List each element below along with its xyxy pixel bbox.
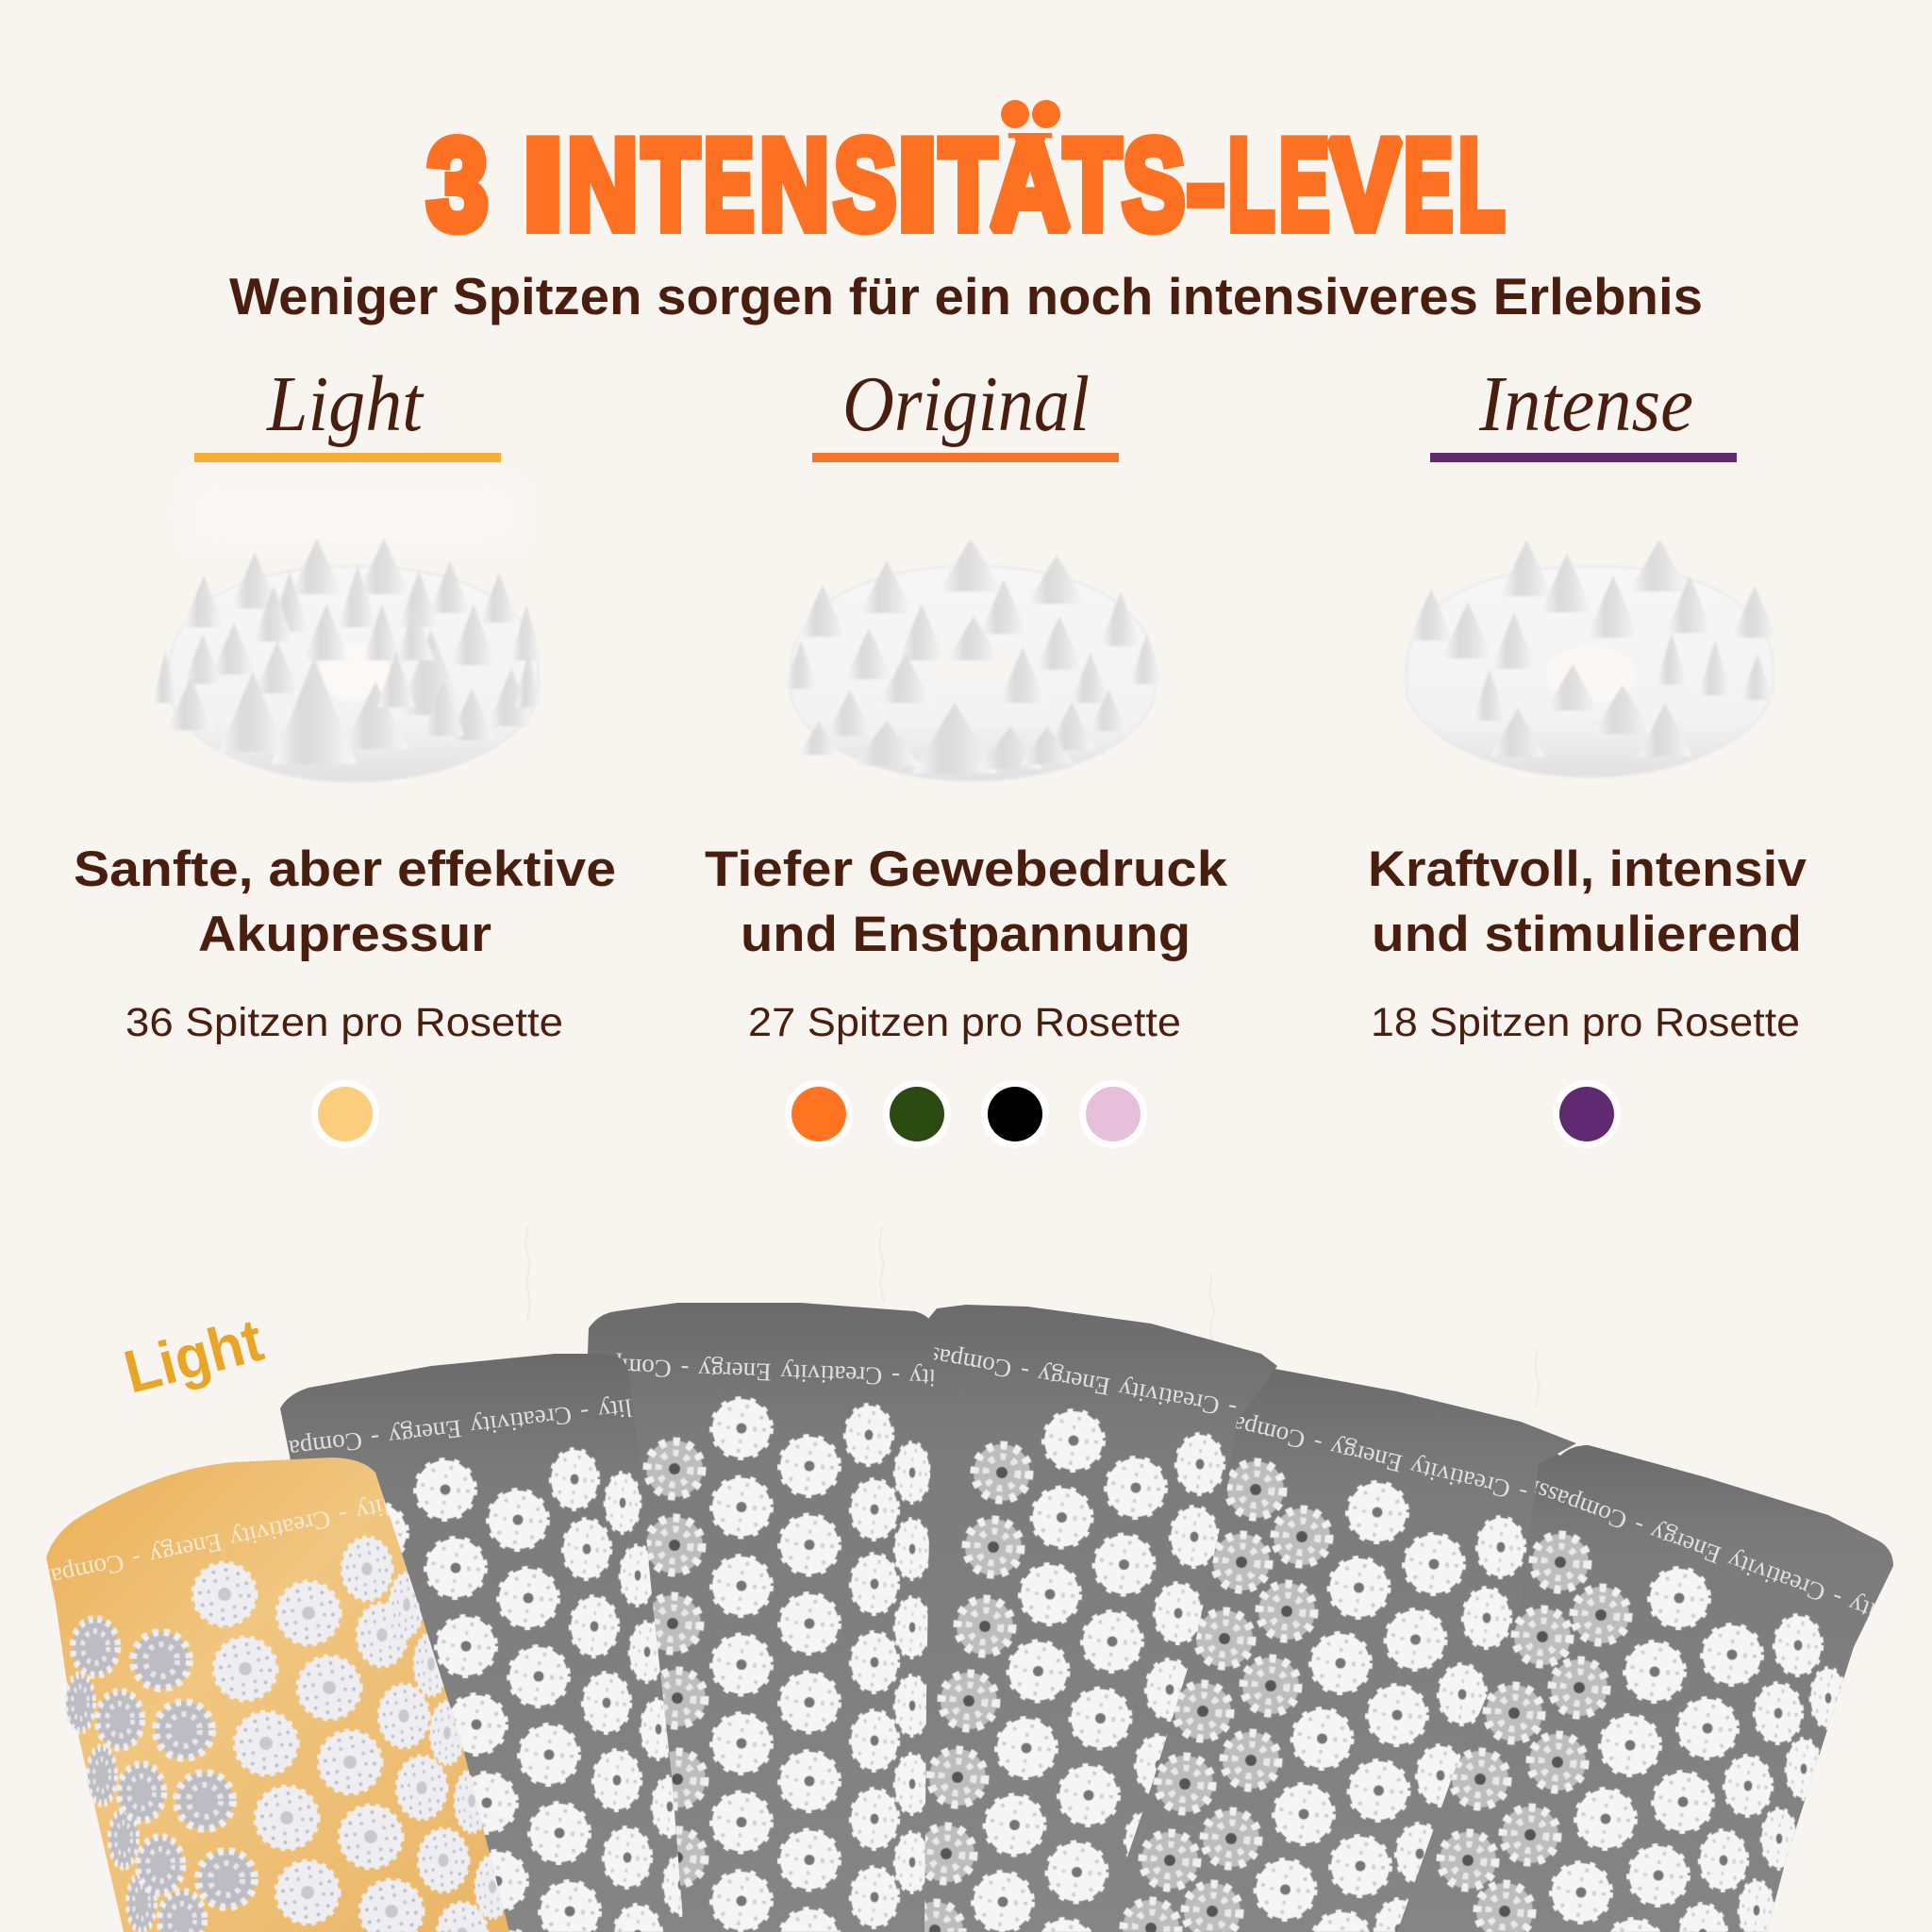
column: Intense	[1368, 360, 1807, 1148]
benefit heading: Intense	[1368, 841, 1807, 962]
callout: Light label: Light	[117, 1306, 270, 1407]
title: I	[897, 113, 938, 257]
benefit heading: Original	[705, 841, 1228, 962]
gray mat 5	[1397, 1445, 1893, 1932]
yellow Light mat	[46, 1457, 509, 1932]
spike count: Intense: 18 Spitzen pro Rosette	[1371, 1000, 1800, 1045]
gray mat 1	[280, 1354, 683, 1932]
colour swatches: Original	[785, 1080, 1147, 1148]
benefit heading: Original: Tiefer Gewebedruck	[705, 841, 1228, 897]
title: S	[1123, 113, 1185, 257]
gray mat 3: Humility - Creativity Energy - Compassion	[884, 1334, 1339, 1441]
title: T	[1064, 113, 1121, 257]
gray mat 2	[588, 1303, 934, 1932]
underline: Original	[812, 453, 1119, 462]
level name: Intense: Intense	[1478, 360, 1693, 448]
title: V	[1330, 113, 1400, 257]
gray mat 3	[924, 1305, 1277, 1932]
benefit heading: Light	[74, 841, 616, 962]
benefit heading: Original: und Enstpannung	[741, 907, 1191, 962]
title: E	[1404, 113, 1453, 257]
column: Light	[74, 360, 616, 1148]
level name: Light: Light	[266, 360, 425, 448]
spike count: Original: 27 Spitzen pro Rosette	[748, 1000, 1181, 1045]
title: S	[834, 113, 896, 257]
underline: Light	[194, 453, 501, 462]
gray mat 1: Humility - Creativity Energy - Compassion	[235, 1387, 691, 1470]
benefit heading: Light: Akupressur	[198, 907, 491, 962]
colour swatch: Light	[311, 1080, 379, 1148]
colour swatch: Intense	[1553, 1080, 1621, 1148]
title: T	[940, 113, 996, 257]
rosette: 18 spikes	[1407, 540, 1777, 777]
gray mat 2: Humility - Creativity Energy - Compassion	[544, 1351, 1002, 1394]
gray mat 4: Humility - Creativity Energy - Compassion	[1178, 1398, 1628, 1532]
title: E	[704, 113, 754, 257]
column: Original	[705, 360, 1228, 1148]
subtitle: Weniger Spitzen sorgen für ein noch intensiveres Erlebnis	[229, 267, 1703, 325]
title: I	[523, 113, 563, 257]
gray mat 4	[1102, 1369, 1576, 1932]
benefit heading: Intense: Kraftvoll, intensiv	[1368, 841, 1807, 897]
title: N	[567, 113, 638, 257]
title: L	[1458, 113, 1505, 257]
spike count: Light: 36 Spitzen pro Rosette	[125, 1000, 563, 1045]
underline: Intense	[1430, 453, 1737, 462]
title: L	[1228, 113, 1274, 257]
gray mat 5: Humility - Creativity Energy - Compassion	[1502, 1466, 1932, 1648]
title: -	[1187, 113, 1224, 257]
benefit heading: Intense: und stimulierend	[1372, 907, 1802, 962]
title: 3	[427, 113, 488, 257]
level name: Original: Original	[842, 360, 1090, 448]
title: N	[759, 113, 829, 257]
benefit heading: Light: Sanfte, aber effektive	[74, 841, 616, 897]
rosette: 36 spikes	[153, 539, 542, 782]
yellow Light mat: Humility - Creativity Energy - Compassion	[0, 1480, 449, 1603]
title: Ä	[991, 113, 1070, 257]
rosette: 27 spikes	[784, 539, 1162, 781]
title: E	[1279, 113, 1329, 257]
title	[427, 94, 1505, 257]
title: T	[642, 113, 699, 257]
